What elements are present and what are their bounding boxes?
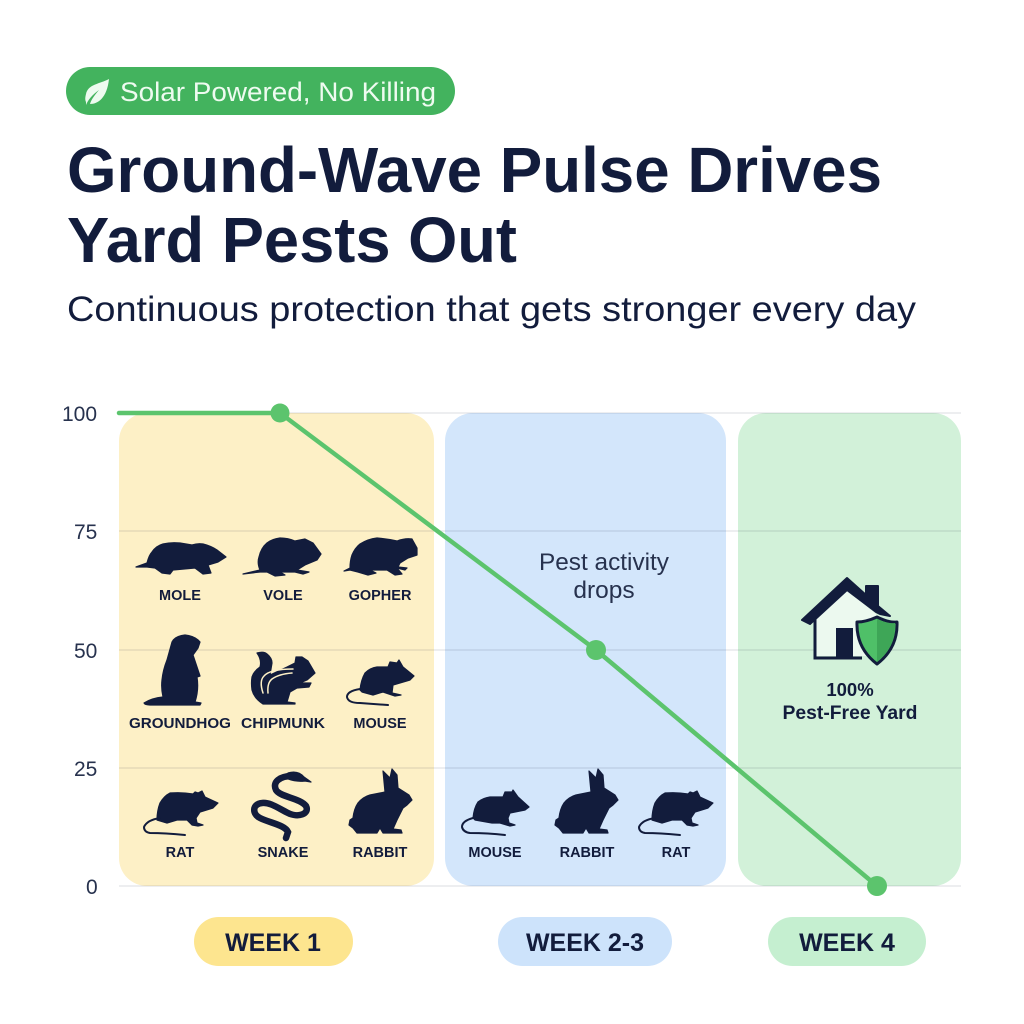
pill: week 4: WEEK 4 — [799, 929, 895, 957]
badge: Solar Powered, No Killing — [66, 67, 455, 115]
animal: mouse — [347, 660, 414, 732]
text: 100% pest-free yard — [782, 679, 918, 724]
label: rat: RAT — [166, 845, 194, 861]
title: Ground-Wave Pulse Drives — [67, 134, 882, 206]
animal: rabbit — [349, 769, 412, 861]
icon: shield — [857, 617, 897, 664]
pill: week 4 — [768, 917, 926, 966]
label: mouse: MOUSE — [468, 845, 522, 861]
animal: chipmunk — [241, 652, 326, 732]
pill: week 1: WEEK 1 — [225, 929, 321, 957]
animal: rabbit week 2-3 — [555, 769, 618, 861]
y axis labels: 100 — [62, 403, 97, 426]
pill: week 2-3 — [498, 917, 672, 966]
animal: rat — [144, 791, 218, 861]
panel: week 1 background — [119, 413, 434, 886]
text: pest activity drops — [539, 549, 670, 604]
title — [67, 134, 882, 276]
subtitle: Continuous protection that gets stronger every day — [67, 290, 917, 329]
label: groundhog: GROUNDHOG — [129, 716, 231, 732]
panel: week 4 background — [738, 413, 961, 886]
label: rabbit: RABBIT — [353, 845, 408, 861]
panel: week 2-3 background — [445, 413, 726, 886]
icon: leaf — [85, 79, 109, 105]
animal: vole — [243, 538, 321, 604]
label: mole: MOLE — [159, 588, 201, 604]
animal: mouse week 2-3 — [462, 790, 529, 861]
label: gopher: GOPHER — [349, 588, 412, 604]
y axis labels: 25 — [74, 758, 97, 781]
y axis labels: 75 — [74, 521, 97, 544]
title: Yard Pests Out — [67, 204, 517, 276]
text: 100% pest-free yard: 100% — [826, 679, 874, 700]
label: snake: SNAKE — [258, 845, 309, 861]
label: chipmunk: CHIPMUNK — [241, 716, 326, 732]
pill: week 2-3: WEEK 2-3 — [526, 929, 644, 957]
animal: snake — [254, 772, 311, 861]
y axis labels — [62, 403, 98, 899]
badge: Solar Powered, No Killing: Solar Powered, No Killing — [120, 77, 436, 107]
text: pest activity drops: drops — [573, 577, 635, 604]
label: vole: VOLE — [263, 588, 303, 604]
animal: rat week 2-3 — [639, 791, 713, 861]
pill: week 1 — [194, 917, 353, 966]
label: mouse: MOUSE — [353, 716, 407, 732]
line chart: pest activity decline — [119, 404, 887, 896]
animal: mole — [136, 543, 226, 604]
y axis labels: 50 — [74, 640, 97, 663]
text: pest activity drops: Pest activity — [539, 549, 670, 576]
label: rabbit: RABBIT — [560, 845, 615, 861]
animal: groundhog — [129, 635, 231, 732]
label: rat: RAT — [662, 845, 690, 861]
text: 100% pest-free yard: Pest-Free Yard — [782, 703, 918, 724]
animal: gopher — [344, 538, 417, 604]
icon: house with shield — [802, 578, 897, 664]
y axis labels: 0 — [86, 876, 98, 899]
